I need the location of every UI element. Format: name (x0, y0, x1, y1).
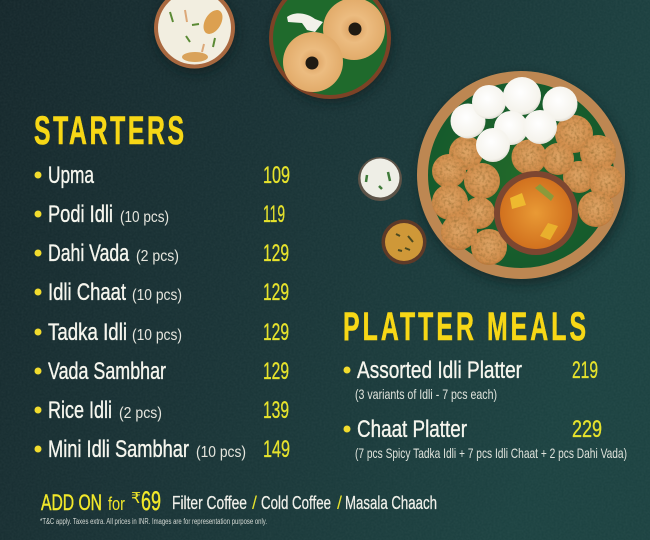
item: dahi vada: Dahi Vada (48, 240, 129, 267)
heading: platter meals: PLATTER MEALS (343, 305, 586, 350)
icon: medu vada plate (269, 0, 393, 103)
add-on offer line: / (337, 493, 342, 513)
icon: coconut chutney bowl (358, 157, 402, 201)
item: idli chaat: Idli Chaat (48, 279, 126, 306)
add-on offer line: Filter Coffee (172, 493, 247, 513)
item: rice idli (34, 397, 289, 424)
item: assorted idli platter: (3 variants of Idli - 7 pcs each) (355, 386, 497, 402)
item: podi idli: (10 pcs) (120, 209, 169, 226)
add-on offer line: 69 (141, 486, 161, 516)
add-on offer line: Cold Coffee (261, 493, 331, 513)
item: podi idli: 119 (263, 201, 285, 228)
heading: starters: STARTERS (34, 109, 184, 154)
item: rice idli: 139 (263, 397, 289, 424)
item: assorted idli platter (344, 357, 598, 402)
icon: idli platter (417, 71, 628, 285)
add-on offer line (41, 486, 437, 516)
add-on offer line: ADD ON (41, 490, 102, 515)
item: idli chaat: 129 (263, 279, 289, 306)
item: assorted idli platter: Assorted Idli Platter (357, 357, 522, 384)
add-on offer line: ₹ (131, 490, 141, 507)
item: vada sambhar: 129 (263, 358, 289, 385)
item: podi idli: Podi Idli (48, 201, 113, 228)
icon: tomato chutney bowl (382, 220, 426, 264)
item: dahi vada: (2 pcs) (136, 248, 179, 265)
item: idli chaat: (10 pcs) (132, 287, 182, 304)
add-on offer line: Masala Chaach (345, 493, 437, 513)
item: vada sambhar: Vada Sambhar (48, 358, 166, 385)
item: upma: Upma (48, 162, 94, 189)
item: mini idli sambhar: (10 pcs) (196, 444, 246, 461)
item: chaat platter (344, 416, 627, 461)
item: assorted idli platter: 219 (572, 357, 598, 384)
item: rice idli: Rice Idli (48, 397, 112, 424)
item: dahi vada: 129 (263, 240, 289, 267)
item: mini idli sambhar: Mini Idli Sambhar (48, 436, 189, 463)
item: idli chaat (34, 279, 289, 306)
item: tadka idli: (10 pcs) (132, 327, 182, 344)
item: podi idli (34, 201, 285, 228)
add-on offer line: for (108, 494, 125, 514)
footnote: *T&C apply. Taxes extra. All prices in INR. Images are for representation purpose only. (40, 517, 267, 526)
item: tadka idli (34, 319, 289, 346)
item: mini idli sambhar: 149 (263, 436, 290, 463)
add-on offer line: / (252, 493, 257, 513)
item: upma (34, 162, 290, 189)
item: vada sambhar (34, 358, 289, 385)
item: rice idli: (2 pcs) (119, 405, 162, 422)
item: tadka idli: 129 (263, 319, 289, 346)
item: tadka idli: Tadka Idli (48, 319, 127, 346)
icon: dahi vada bowl (154, 0, 237, 74)
item: chaat platter: 229 (572, 416, 602, 443)
item: upma: 109 (263, 162, 290, 189)
item: chaat platter: Chaat Platter (357, 416, 467, 443)
item: dahi vada (34, 240, 289, 267)
panel: platter meals (343, 305, 627, 461)
panel: starters (34, 109, 290, 463)
